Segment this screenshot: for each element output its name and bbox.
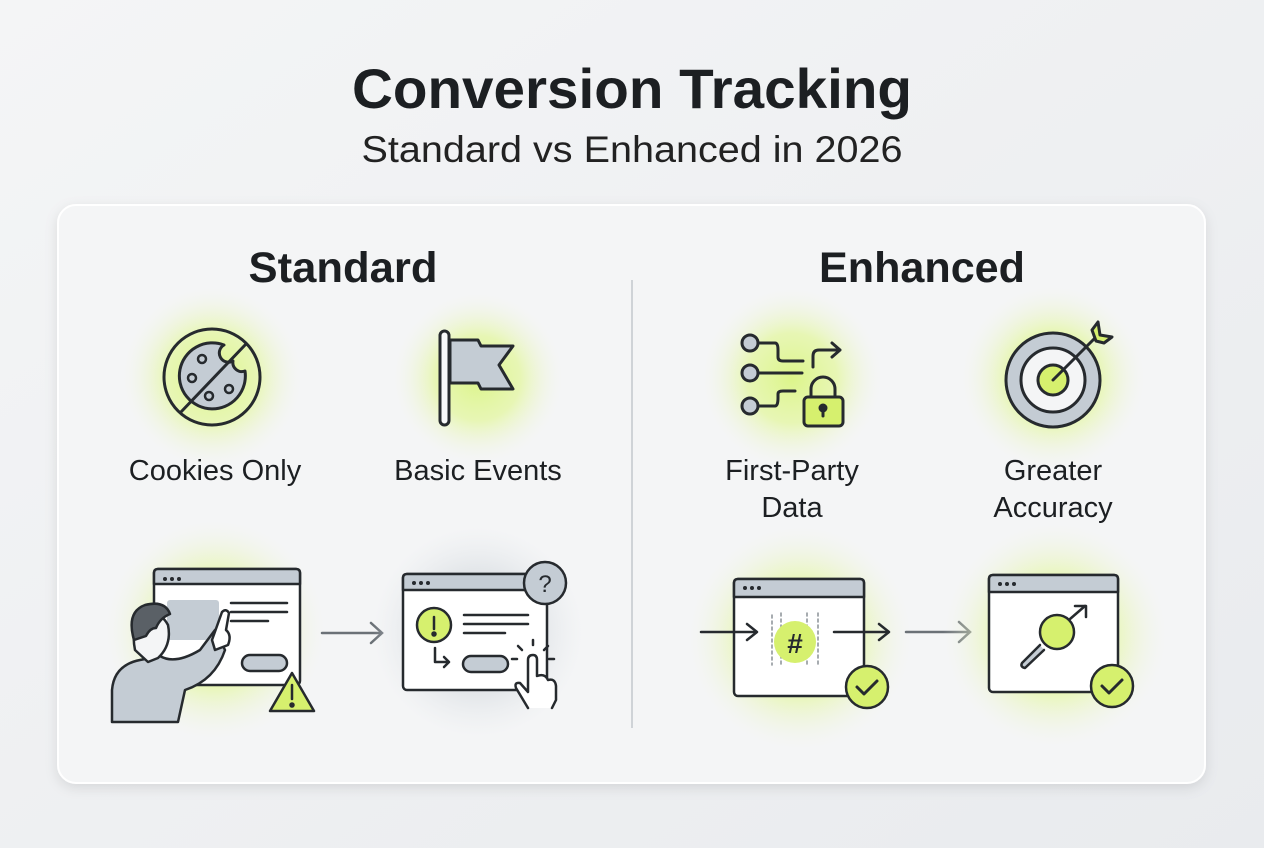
- arrow: [322, 623, 382, 643]
- icon: flag: [393, 293, 563, 463]
- icon: target: [961, 286, 1145, 470]
- illustration: hashed first-party data: #: [787, 628, 803, 659]
- label: Greater Accuracy: Greater: [1004, 455, 1102, 487]
- subtitle: Standard vs Enhanced in 2026: [362, 129, 902, 170]
- panel: comparison card: Data: [761, 492, 823, 524]
- illustration: accurate measurement: [943, 523, 1167, 747]
- title: Conversion Tracking: [352, 57, 912, 120]
- arrow: [906, 622, 970, 642]
- label: Basic Events: Basic Events: [394, 455, 562, 487]
- label: Cookies Only: Cookies Only: [129, 455, 302, 487]
- panel: comparison card: Accuracy: [993, 492, 1113, 524]
- illustration: uncertain event: ?: [538, 571, 552, 598]
- illustration: hashed first-party data: [688, 526, 912, 750]
- illustration: uncertain event: [373, 527, 583, 737]
- panel: comparison card: [58, 205, 1205, 783]
- heading: Enhanced: Enhanced: [819, 244, 1025, 292]
- heading: Standard: Standard: [248, 244, 438, 292]
- illustration: user clicking with warning: [105, 520, 325, 740]
- icon: first-party data: [702, 288, 882, 468]
- label: First-Party Data: First-Party: [725, 455, 859, 487]
- icon: no cookies: [122, 287, 302, 467]
